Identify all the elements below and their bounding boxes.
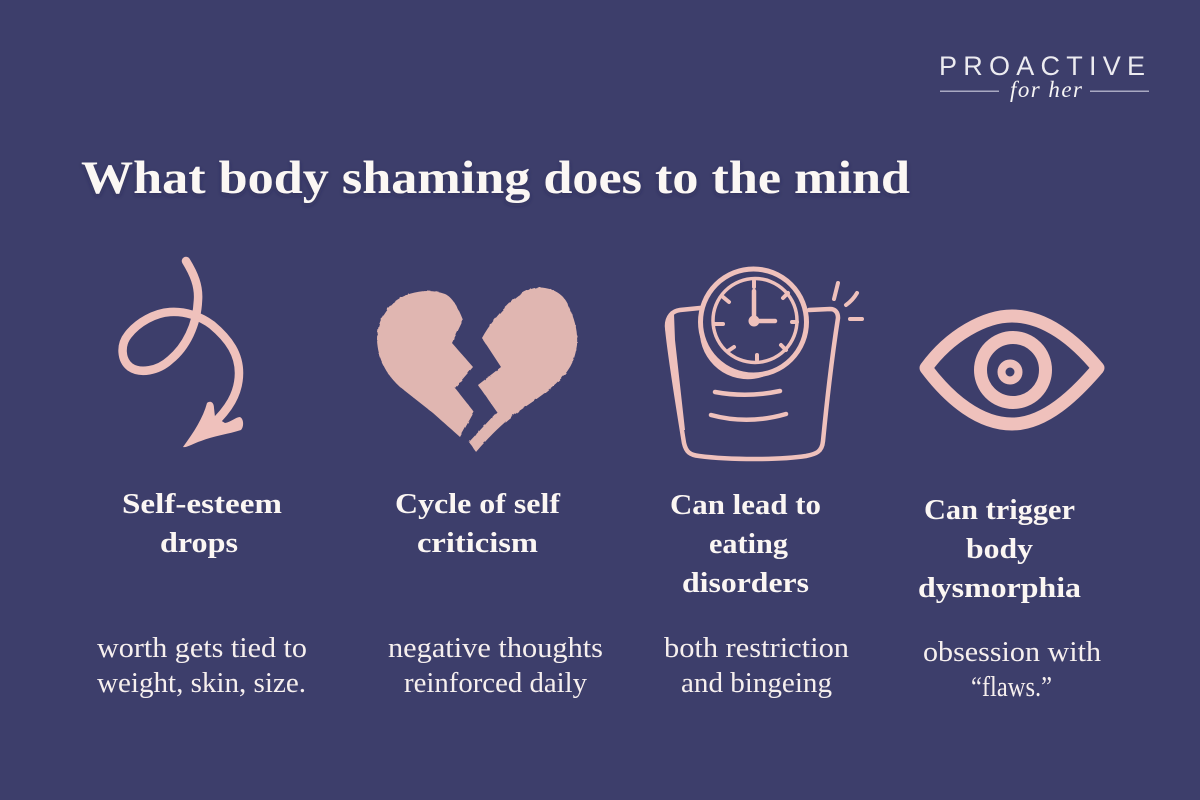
column 1: self-esteem drops: drops	[160, 527, 238, 559]
column 4: can trigger body dysmorphia: dysmorphia	[918, 572, 1082, 604]
icon: looping down arrow	[123, 261, 243, 447]
column 4: can trigger body dysmorphia: obsession with	[923, 637, 1101, 668]
column 4: can trigger body dysmorphia	[918, 494, 1101, 703]
icon: eye	[926, 316, 1098, 424]
icon: broken heart	[377, 287, 577, 452]
logo: Proactive for her: PROACTIVE	[939, 51, 1145, 81]
column 4: can trigger body dysmorphia: body	[966, 533, 1034, 565]
icon: bathroom scale	[665, 269, 862, 459]
column 2: cycle of self criticism: Cycle of self	[395, 488, 560, 520]
column 3: can lead to eating disorders: eating	[709, 528, 789, 560]
column 3: can lead to eating disorders	[664, 489, 849, 699]
column 3: can lead to eating disorders: Can lead to	[670, 489, 821, 521]
column 4: can trigger body dysmorphia: Can trigger	[924, 494, 1075, 526]
logo: Proactive for her: for her	[1010, 77, 1083, 102]
column 3: can lead to eating disorders: and bingeing	[681, 668, 832, 699]
column 2: cycle of self criticism	[388, 488, 603, 699]
column 1: self-esteem drops	[97, 488, 307, 699]
column 1: self-esteem drops: worth gets tied to	[97, 633, 307, 664]
column 2: cycle of self criticism: negative thoughts	[388, 633, 603, 664]
column 3: can lead to eating disorders: disorders	[682, 567, 809, 599]
column 3: can lead to eating disorders: both restriction	[664, 633, 849, 664]
title: What body shaming does to the mind	[81, 152, 910, 204]
column 4: can trigger body dysmorphia: “flaws.”	[971, 672, 1052, 703]
column 1: self-esteem drops: Self-esteem	[122, 488, 282, 520]
column 2: cycle of self criticism: reinforced daily	[404, 668, 587, 699]
column 2: cycle of self criticism: criticism	[417, 527, 538, 559]
logo: Proactive for her	[939, 51, 1149, 102]
column 1: self-esteem drops: weight, skin, size.	[97, 668, 306, 699]
clock dial	[700, 269, 806, 379]
